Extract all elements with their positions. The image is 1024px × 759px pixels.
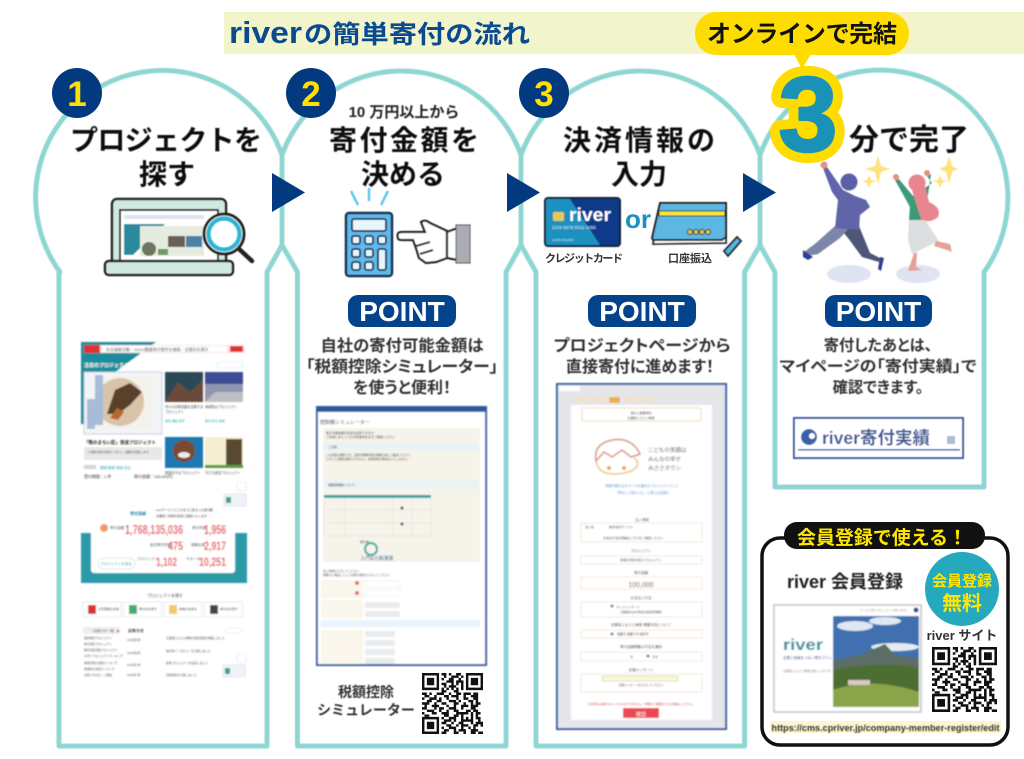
panel 1 website screenshot: お知らせ一覧: [93, 628, 114, 633]
simulator screenshot: この試算は概算です。実際の税額控除は税理士等にご確認ください。: [326, 453, 412, 457]
panel 1 website screenshot: 2025年7月: [127, 673, 141, 677]
heading step 3: 決済情報の: [563, 125, 715, 156]
point text step 2: 「税額控除シミュレーター」: [306, 358, 498, 376]
donation form screenshot: 企業版ふるさと納税: [627, 415, 655, 420]
panel 1 website screenshot: サポーター: [186, 556, 204, 561]
simulator screenshot: ご注意: [328, 444, 337, 449]
panel 1 website screenshot: 地域防災支援ランキング: [84, 667, 115, 671]
step number 2: 2: [301, 75, 321, 114]
point text step 3: プロジェクトページから: [554, 337, 730, 355]
label: credit card: クレジットカード: [545, 252, 623, 265]
callout: online complete: オンラインで完結: [707, 21, 897, 48]
panel 1 website screenshot: 健康を守るプロジェクト: [165, 470, 200, 475]
panel 1 website screenshot: 2025年8月: [127, 651, 141, 655]
panel 1 website screenshot: 寄付先を探す: [139, 606, 157, 611]
simulator screenshot: 控除額シミュレーター: [320, 419, 370, 426]
heading step 1: 探す: [139, 159, 195, 190]
donation form screenshot: 可: [630, 655, 633, 659]
panel 1 website screenshot: 2,917: [204, 539, 226, 553]
panel 1 website screenshot: 企業様と地域の皆様に感謝いたします: [156, 513, 207, 518]
icon: credit card: [545, 198, 620, 246]
point text step 3: [554, 337, 730, 376]
point badge step 2: POINT: [359, 296, 445, 327]
point text step 2: を使うと便利！: [353, 379, 451, 397]
donation form screenshot: 100,000: [628, 582, 654, 589]
big number 3: 3: [779, 56, 837, 174]
donation form screenshot: 確認: [636, 711, 646, 718]
donation form screenshot: 地域の未来を創るプロジェクト: [620, 557, 662, 562]
donation form screenshot: 寄付金額: [634, 570, 648, 575]
panel 1 website screenshot: riverサービスでこれまでに集まった寄付額: [156, 507, 213, 512]
badge: free registration: 会員登録: [932, 572, 992, 590]
simulator screenshot: ご利用にあたっての注意事項を必ずご確認ください: [326, 434, 395, 439]
panel 1 website screenshot: 2025年8月: [127, 638, 141, 642]
panel 1 website screenshot: プロジェクト: [165, 409, 184, 414]
donation form screenshot: 持続可能なまちづくりを進めるプロジェクトとして: [605, 483, 679, 488]
heading step 4: 分で完了: [849, 124, 969, 157]
donation form screenshot: 応援メッセージを入力してください: [619, 683, 663, 687]
donation form screenshot: こどもの笑顔は: [648, 446, 687, 454]
panel 1 website screenshot: 注目のプロジェクト！: [84, 362, 134, 369]
label: tax simulator: 税額控除: [338, 684, 394, 700]
button: river donation record: river寄付実績: [822, 428, 930, 448]
donation form screenshot: [557, 384, 726, 729]
panel 1 website screenshot: [81, 342, 247, 677]
panel: member registration: [762, 522, 1008, 745]
QR code: simulator: [422, 673, 483, 734]
panel 1 website screenshot: 地域活性化支援ランキング: [84, 661, 118, 665]
panel 1 website screenshot: 河川の清掃活動を支援する: [165, 404, 203, 409]
donation form screenshot: 法人名: [585, 524, 594, 529]
illustration: jumping people: [803, 156, 958, 283]
label: or: or: [625, 204, 651, 234]
website screenshot: 企業と地域をつなぐ寄付プラットフォーム: [783, 655, 850, 660]
step number 1: 1: [67, 75, 87, 114]
panel 1 website screenshot: 寄付金額：100,000円: [134, 473, 172, 479]
simulator screenshot: 税額控除額について: [328, 482, 355, 487]
point text step 4: 寄付したあとは、: [824, 336, 932, 354]
panel 1 website screenshot: 新規プロジェクトを追加しました: [166, 661, 208, 665]
donation form screenshot: プロジェクト: [630, 548, 652, 553]
simulator screenshot: 入力した金額は保存されません。試算結果の保証はいたしません。: [326, 457, 410, 461]
panel 1 website screenshot: 地方創生プロジェクト: [84, 642, 112, 646]
donation form screenshot: 企業版ふるさと納税 掲載可否について: [611, 622, 672, 627]
point text step 2: [306, 336, 498, 397]
point text step 2: 自社の寄付可能金額は: [320, 336, 484, 355]
title band: river: [229, 15, 302, 50]
panel 1 website screenshot: 「公園の池を未来につなぐ」活動を支援します: [86, 449, 149, 454]
panel 1 website screenshot: 475: [168, 539, 183, 553]
heading step 2: [329, 104, 479, 190]
donation form screenshot: 不可: [652, 655, 658, 659]
website screenshot: [774, 605, 921, 712]
simulator screenshot: 寄付可能金額の目安を試算できます: [326, 430, 374, 435]
point badge step 4: POINT: [836, 296, 921, 327]
point text step 4: マイページの「寄付実績」で: [780, 358, 977, 376]
label: bank transfer: 口座振込: [668, 251, 712, 265]
heading step 1: [70, 125, 262, 190]
badge: free registration: 無料: [942, 592, 982, 615]
panel 1 website screenshot: 寄付先を探す: [220, 606, 238, 611]
heading step 2: 10 万円以上から: [349, 104, 459, 121]
panel 1 website screenshot: 1,768,135,036: [125, 522, 183, 537]
panel 1 website screenshot: 受付期限：1 件: [84, 473, 111, 479]
QR code: river site: [932, 647, 997, 712]
donation form screenshot: 「寄付して良かった」と思える支援を: [615, 490, 669, 495]
panel 1 website screenshot: 企業版ふるさと納税の最新情報を掲載しました: [166, 636, 225, 640]
big number 3: 3: [779, 56, 837, 174]
point text step 3: 直接寄付に進めます！: [566, 357, 714, 376]
heading step 1: プロジェクトを: [70, 125, 262, 156]
title band: [224, 12, 1024, 54]
icon: credit card: CARD HOLDER: [552, 238, 575, 242]
panel 1 website screenshot: 2025年7月: [127, 663, 141, 667]
simulator screenshot: 寄付者：: [360, 539, 372, 544]
point text step 4: [780, 336, 977, 396]
arrow 1: [272, 173, 305, 212]
donation form screenshot: みんなの幸せ: [648, 456, 682, 463]
badge: member registration heading: [784, 522, 985, 549]
donation form screenshot: 応援メッセージ: [629, 667, 654, 672]
icon: credit card: river: [569, 205, 611, 225]
panel 1 website screenshot: 「鴨のまちい匠」発達プロジェクト: [84, 439, 156, 446]
donation form screenshot: お支払方法の詳細はこちらをご確認ください: [603, 535, 663, 540]
icon: bank account: [652, 203, 741, 256]
callout: online complete: [695, 12, 909, 69]
donation form screenshot: 寄付金額掲載の可否を選択: [620, 644, 662, 649]
step number 1: [52, 68, 102, 118]
icon: laptop with magnifier: [105, 199, 252, 275]
URL: https://cms.cpriver.jp/company-member-register/edit: [772, 723, 1000, 734]
panel 1 website screenshot: 教育支援活動プロジェクト: [84, 648, 118, 652]
panel 1 website screenshot: お知らせ: [128, 627, 144, 633]
donation form screenshot: 法人情報: [635, 517, 649, 522]
point badge step 3: POINT: [599, 296, 685, 327]
title band: の簡単寄付の流れ: [304, 21, 530, 49]
panel 1 website screenshot: 10,251: [199, 555, 226, 569]
panel 1 website screenshot: 教育 防災 地域: [205, 418, 225, 423]
heading step 2: 寄付金額を: [329, 125, 479, 156]
panel 1 website screenshot: 環境保全プロジェクト: [84, 636, 112, 640]
icon: credit card: 1234 5678 9012 3456: [552, 225, 596, 230]
panel 1 website screenshot: お問い合わせ・ご相談: [84, 673, 112, 677]
button: river donation record: [794, 418, 963, 458]
donation form screenshot: お支払い方法: [630, 595, 652, 600]
panel 1 website screenshot: 寄付実績: [130, 510, 146, 516]
panel 1 website screenshot: 地域の未来を: [179, 606, 197, 611]
heading step 2: 決める: [361, 159, 445, 190]
panel 1 website screenshot: 総合寄付件数: [150, 542, 171, 547]
donation form screenshot: 地元人事業委託: [630, 410, 652, 415]
panel 1 website screenshot: 子ども食堂プロジェクト: [205, 470, 240, 475]
point text step 4: 確認できます。: [833, 378, 923, 396]
donation form screenshot: 掲載可 掲載不可 検討中: [617, 631, 649, 636]
panel 1 website screenshot: 1,102: [156, 555, 177, 569]
label: river member registration: river 会員登録: [787, 572, 903, 592]
panel 1 website screenshot: 環境 教育 地域 文化: [100, 465, 131, 470]
panel 1 website screenshot: 活動報告を公開しました: [166, 673, 197, 677]
panel 1 website screenshot: プロジェクトを探す: [147, 592, 183, 598]
heading step 3: [563, 125, 715, 190]
simulator screenshot: 入門&元帳簿案: [360, 555, 394, 562]
label: river site: river サイト: [927, 628, 997, 643]
simulator screenshot: 法人情報を入力してください: [323, 569, 359, 573]
arrow 2: [507, 173, 540, 212]
panel 1 website screenshot: 登録企業: [191, 542, 205, 547]
panel 1 website screenshot: 子育てプロジェクトランキング: [84, 654, 123, 658]
panel 1 website screenshot: 寄付金額: [110, 525, 124, 530]
simulator screenshot: [317, 407, 486, 665]
badge: member registration heading: 会員登録で使える！: [797, 527, 967, 549]
badge: free registration: [925, 552, 999, 626]
step number 2: [286, 68, 336, 118]
panel 1 website screenshot: 寄付者インタビューを公開しました: [166, 649, 211, 653]
donation form screenshot: 口座振込みの場合は別途手数料: [620, 609, 662, 614]
panel 1 website screenshot: 1,956: [204, 522, 226, 537]
website screenshot: 企業版ふるさと納税の新しいかたち: [783, 668, 831, 673]
arrow 3: [743, 173, 776, 212]
website screenshot: river: [783, 637, 823, 654]
panel 1 website screenshot: 社会貢献活動・SDGs関連寄付案件を検索・支援先を探す: [106, 346, 209, 352]
step number 3: 3: [534, 75, 554, 114]
website screenshot: サービス 寄付 プロジェクト お問い合わせ: [860, 608, 908, 612]
panel 1 website screenshot: 寄付件数: [192, 525, 206, 530]
panel 1 website screenshot: 環境 福祉 教育: [165, 418, 185, 423]
simulator screenshot: 税理士に確認した上で必要な項目を入力してください: [323, 573, 390, 577]
donation form screenshot: クレジットカード: [616, 604, 640, 609]
step number 3: [519, 68, 569, 118]
donation form screenshot: ※お申込み後のキャンセルはできません。内容をご確認のうえお進みください。: [587, 701, 695, 706]
panel 1 website screenshot: プロジェクトを見る: [100, 561, 132, 566]
donation form screenshot: みささタウン: [648, 464, 682, 472]
donation form screenshot: 株式会社サンプル: [609, 524, 633, 529]
panel 1 website screenshot: 地域防災プロジェクト: [205, 404, 237, 409]
panel 1 website screenshot: プロジェクト: [137, 556, 158, 561]
label: tax simulator: シミュレーター: [317, 702, 415, 718]
icon: calculator with pointing hand: [346, 188, 470, 276]
heading step 3: 入力: [611, 159, 667, 190]
panel 1 website screenshot: 災害復興の支援: [98, 606, 119, 611]
label: tax simulator: [317, 684, 415, 718]
